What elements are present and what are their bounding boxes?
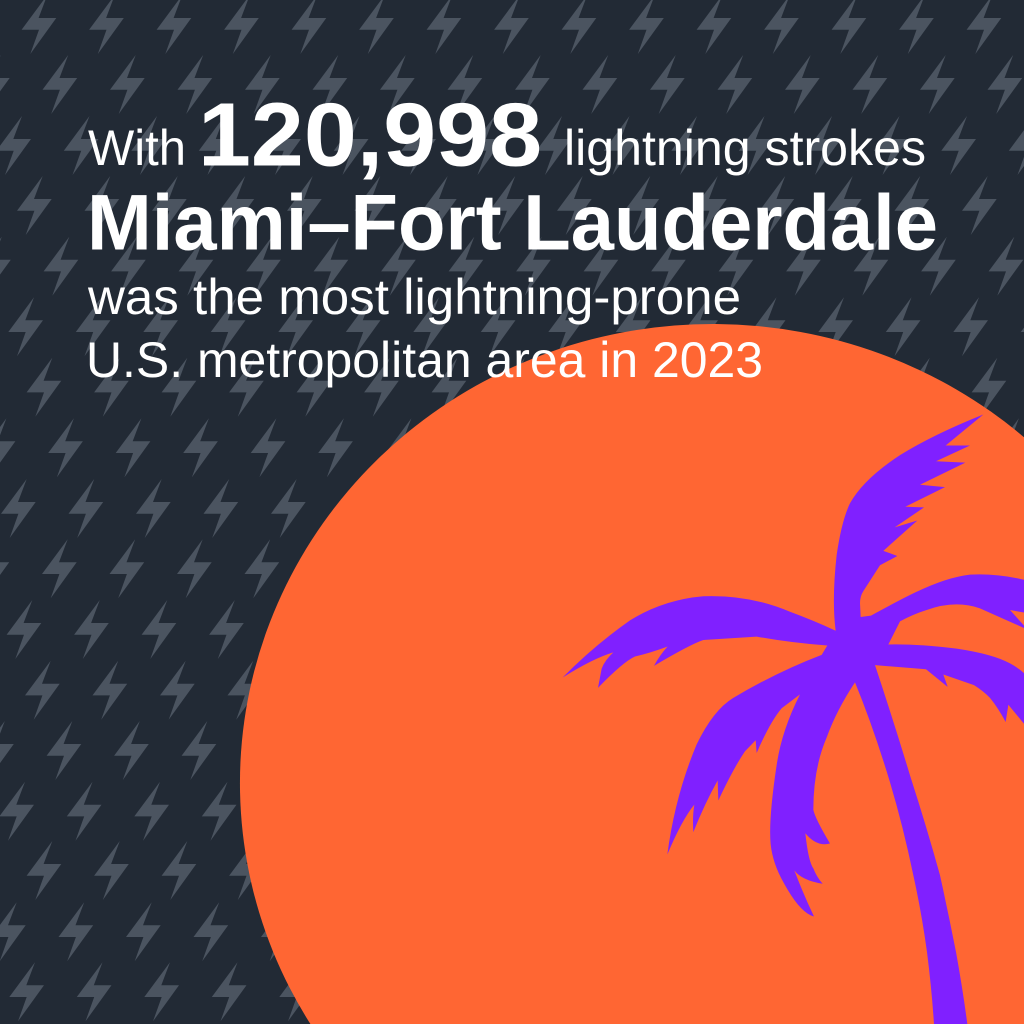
orange sun circle — [240, 324, 1024, 1024]
line 3: was the most lightning-prone — [87, 269, 741, 325]
line 2: metro name: Miami–Fort Lauderdale — [87, 178, 938, 266]
line 1: lightning strokes: lightning strokes — [564, 120, 926, 176]
line 4: U.S. metropolitan area in 2023 — [86, 332, 763, 388]
line 1: stroke count: 120,998 — [198, 86, 542, 186]
headline text block — [86, 86, 938, 388]
line 1: With: With — [88, 120, 186, 176]
palm tree silhouette — [563, 414, 1024, 1024]
